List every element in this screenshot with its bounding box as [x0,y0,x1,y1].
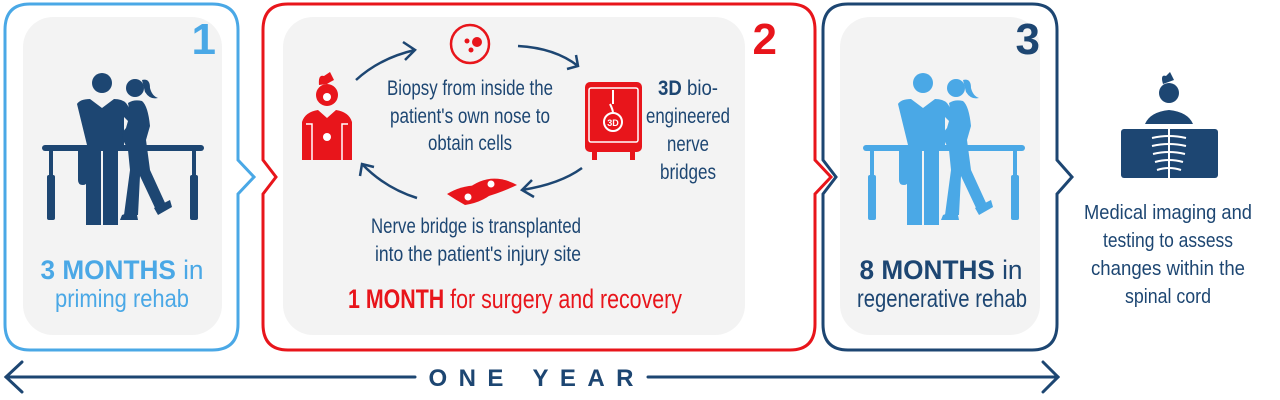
text: 3D bio-engineered nerve bridges: 3D bio- [658,77,718,100]
icon: 3D printer [585,82,642,160]
icon: rehab figures light blue [863,73,1025,225]
text: biopsy: obtain cells [428,132,512,155]
text: medical imaging: changes within the [1091,257,1245,280]
icon: rehab figures navy [42,73,204,225]
text: biopsy [387,77,553,155]
text: 3 months priming rehab: 3 MONTHS in [40,255,204,285]
text: 1 month: 1 MONTH for surgery and recovery [348,284,682,314]
text: ONE YEAR: ONE YEAR [428,365,634,392]
text: transplant: Nerve bridge is transplanted [371,215,581,238]
text: medical imaging: testing to assess [1103,229,1233,252]
text: biopsy: Biopsy from inside the [387,77,553,100]
arrow: one year timeline [6,362,1058,392]
icon: medical imaging x-ray [1121,72,1218,178]
text: 3D bio-engineered nerve bridges: engineered [646,105,730,128]
text: medical imaging: Medical imaging and [1084,201,1252,224]
text: medical imaging: spinal cord [1125,285,1211,308]
text: biopsy: patient's own nose to [390,105,550,128]
icon: nerve cells [447,179,517,205]
panel: step 3 regenerative rehab [823,4,1072,350]
icon: petri dish cells [451,25,489,63]
panel: step 1 priming rehab [5,4,254,350]
number 3: 3 [1016,15,1040,64]
text: transplant [371,215,581,266]
icon: 3D printer: 3D [607,118,619,128]
panel: step 1 priming rehab: priming rehab [55,285,189,313]
text: 3D bio-engineered nerve bridges: nerve [667,133,709,156]
text: 3D bio-engineered nerve bridges: bridges [660,161,716,184]
number 2: 2 [753,15,777,64]
text: transplant: into the patient's injury site [375,243,581,266]
text: 8 months: 8 MONTHS in [860,255,1022,285]
icon: patient [302,72,352,160]
panel: step 3 regenerative rehab: regenerative rehab [857,285,1027,313]
number 1: 1 [192,15,216,64]
text: medical imaging [1084,201,1252,308]
panel: step 2 surgery [263,4,831,350]
text: 3D bio-engineered nerve bridges [646,77,730,184]
arrows: cycle [356,42,582,198]
